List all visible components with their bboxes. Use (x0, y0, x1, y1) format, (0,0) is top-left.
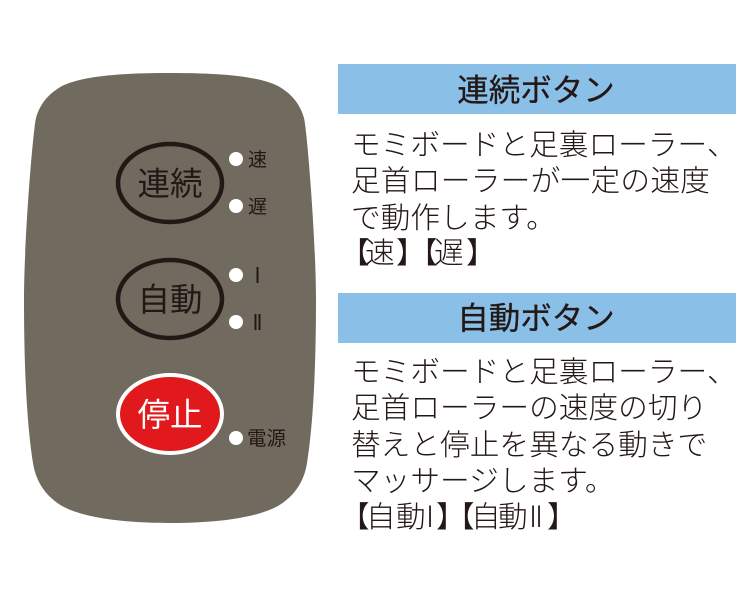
heading bar: continuous button: 連続ボタン (457, 72, 615, 108)
text block: auto description (340, 348, 737, 536)
text block: continuous description: モミボードと足裏ローラー、 (351, 121, 737, 164)
button: continuous: 連続 (137, 166, 203, 202)
text block: continuous description: 足首ローラーが一定の速度 (351, 157, 710, 200)
indicator: slow (229, 196, 267, 218)
heading bar: continuous button (338, 64, 736, 114)
panel: continuous button description (338, 64, 737, 272)
indicator: fast: 速 (248, 149, 267, 171)
button: stop: 停止 (137, 397, 203, 433)
button: auto: 自動 (137, 282, 203, 318)
text block: continuous description: 【速】【遅】 (340, 229, 496, 272)
button: auto (118, 260, 222, 338)
indicator: fast (229, 149, 267, 171)
text block: auto description: 足首ローラーの速度の切り (351, 384, 707, 427)
heading bar: auto button (338, 293, 736, 343)
text block: auto description: モミボードと足裏ローラー、 (351, 348, 737, 391)
text block: continuous description: で動作します。 (351, 194, 556, 237)
indicator: slow: 遅 (248, 196, 267, 218)
indicator: auto II (229, 314, 260, 330)
indicator: auto I (229, 267, 258, 283)
text block: auto description: マッサージします。 (351, 457, 615, 500)
heading bar: auto button: 自動ボタン (457, 300, 615, 336)
text block: continuous description (340, 121, 737, 272)
button: continuous (118, 144, 222, 222)
panel: auto button description (338, 293, 737, 536)
text block: auto description: 【自動I】【自動II】 (340, 493, 577, 536)
panel: remote control (24, 73, 316, 523)
button: stop (118, 375, 222, 453)
text block: auto description: 替えと停止を異なる動きで (351, 421, 707, 464)
remote body (24, 73, 316, 523)
indicator: power (229, 428, 286, 450)
indicator: power: 電源 (247, 428, 286, 450)
